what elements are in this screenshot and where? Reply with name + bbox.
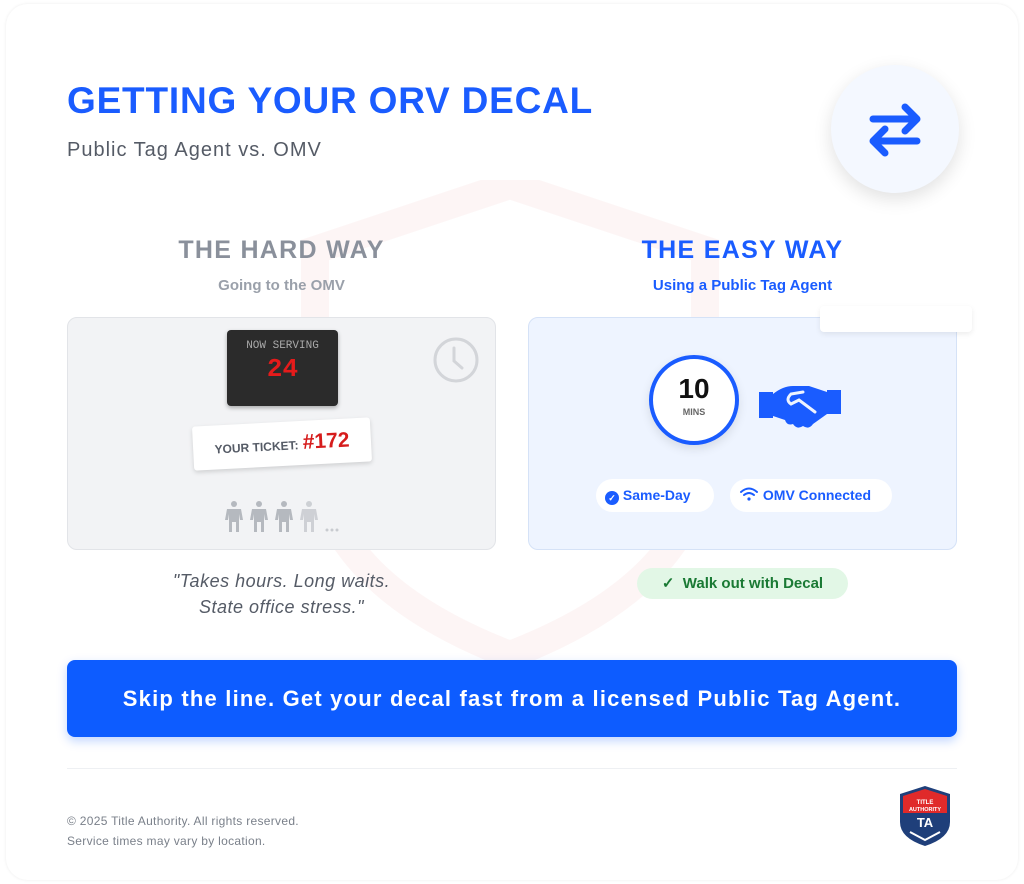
chip: omv connected: OMV Connected [763, 487, 871, 503]
heading: hard way [178, 236, 385, 294]
10 mins badge: MINS [683, 407, 705, 417]
footer text [67, 814, 299, 848]
subtitle: Public Tag Agent vs. OMV [67, 139, 322, 161]
badge: walk out with decal [637, 568, 848, 599]
cta banner: Skip the line. Get your decal fast from a licensed Public Tag Agent. [123, 686, 901, 711]
watermark shield [301, 180, 719, 660]
ticket: YOUR TICKET: #172 [214, 428, 350, 457]
chip: omv connected [730, 479, 892, 512]
icon: clock [434, 338, 478, 382]
footer text: © 2025 Title Authority. All rights reserved. [67, 814, 299, 828]
now serving board: 24 [267, 354, 298, 384]
logo: title authority shield [900, 786, 950, 846]
ticket [192, 417, 372, 471]
icon: handshake [759, 386, 841, 428]
divider [67, 768, 957, 769]
logo: title authority shield: TITLE [917, 800, 933, 806]
now serving board [227, 330, 338, 406]
heading: easy way [642, 236, 843, 294]
heading: hard way: Going to the OMV [218, 277, 345, 294]
tooltip ghost [820, 306, 972, 332]
heading: hard way: THE HARD WAY [178, 236, 385, 264]
quote [173, 571, 390, 617]
footer text: Service times may vary by location. [67, 834, 266, 848]
chip: same-day: ✓ [608, 493, 616, 503]
icon: swap arrows [831, 65, 959, 193]
quote: "Takes hours. Long waits. [173, 571, 390, 591]
icon: people queue [225, 501, 338, 532]
heading: easy way: THE EASY WAY [642, 236, 843, 264]
logo: title authority shield: TA [917, 815, 934, 830]
chip: same-day: Same-Day [623, 487, 691, 503]
panel: easy way [528, 317, 957, 550]
quote: State office stress." [199, 597, 364, 617]
title: GETTING YOUR ORV DECAL [67, 80, 593, 121]
now serving board: NOW SERVING [246, 340, 319, 352]
panel: hard way [67, 317, 496, 550]
10 mins badge [649, 355, 739, 445]
badge: walk out with decal: ✓ Walk out with Decal [662, 575, 823, 592]
heading: easy way: Using a Public Tag Agent [653, 277, 832, 294]
cta banner [67, 660, 957, 737]
10 mins badge: 10 [678, 373, 710, 404]
logo: title authority shield: AUTHORITY [909, 807, 941, 813]
chip: same-day [596, 479, 714, 512]
